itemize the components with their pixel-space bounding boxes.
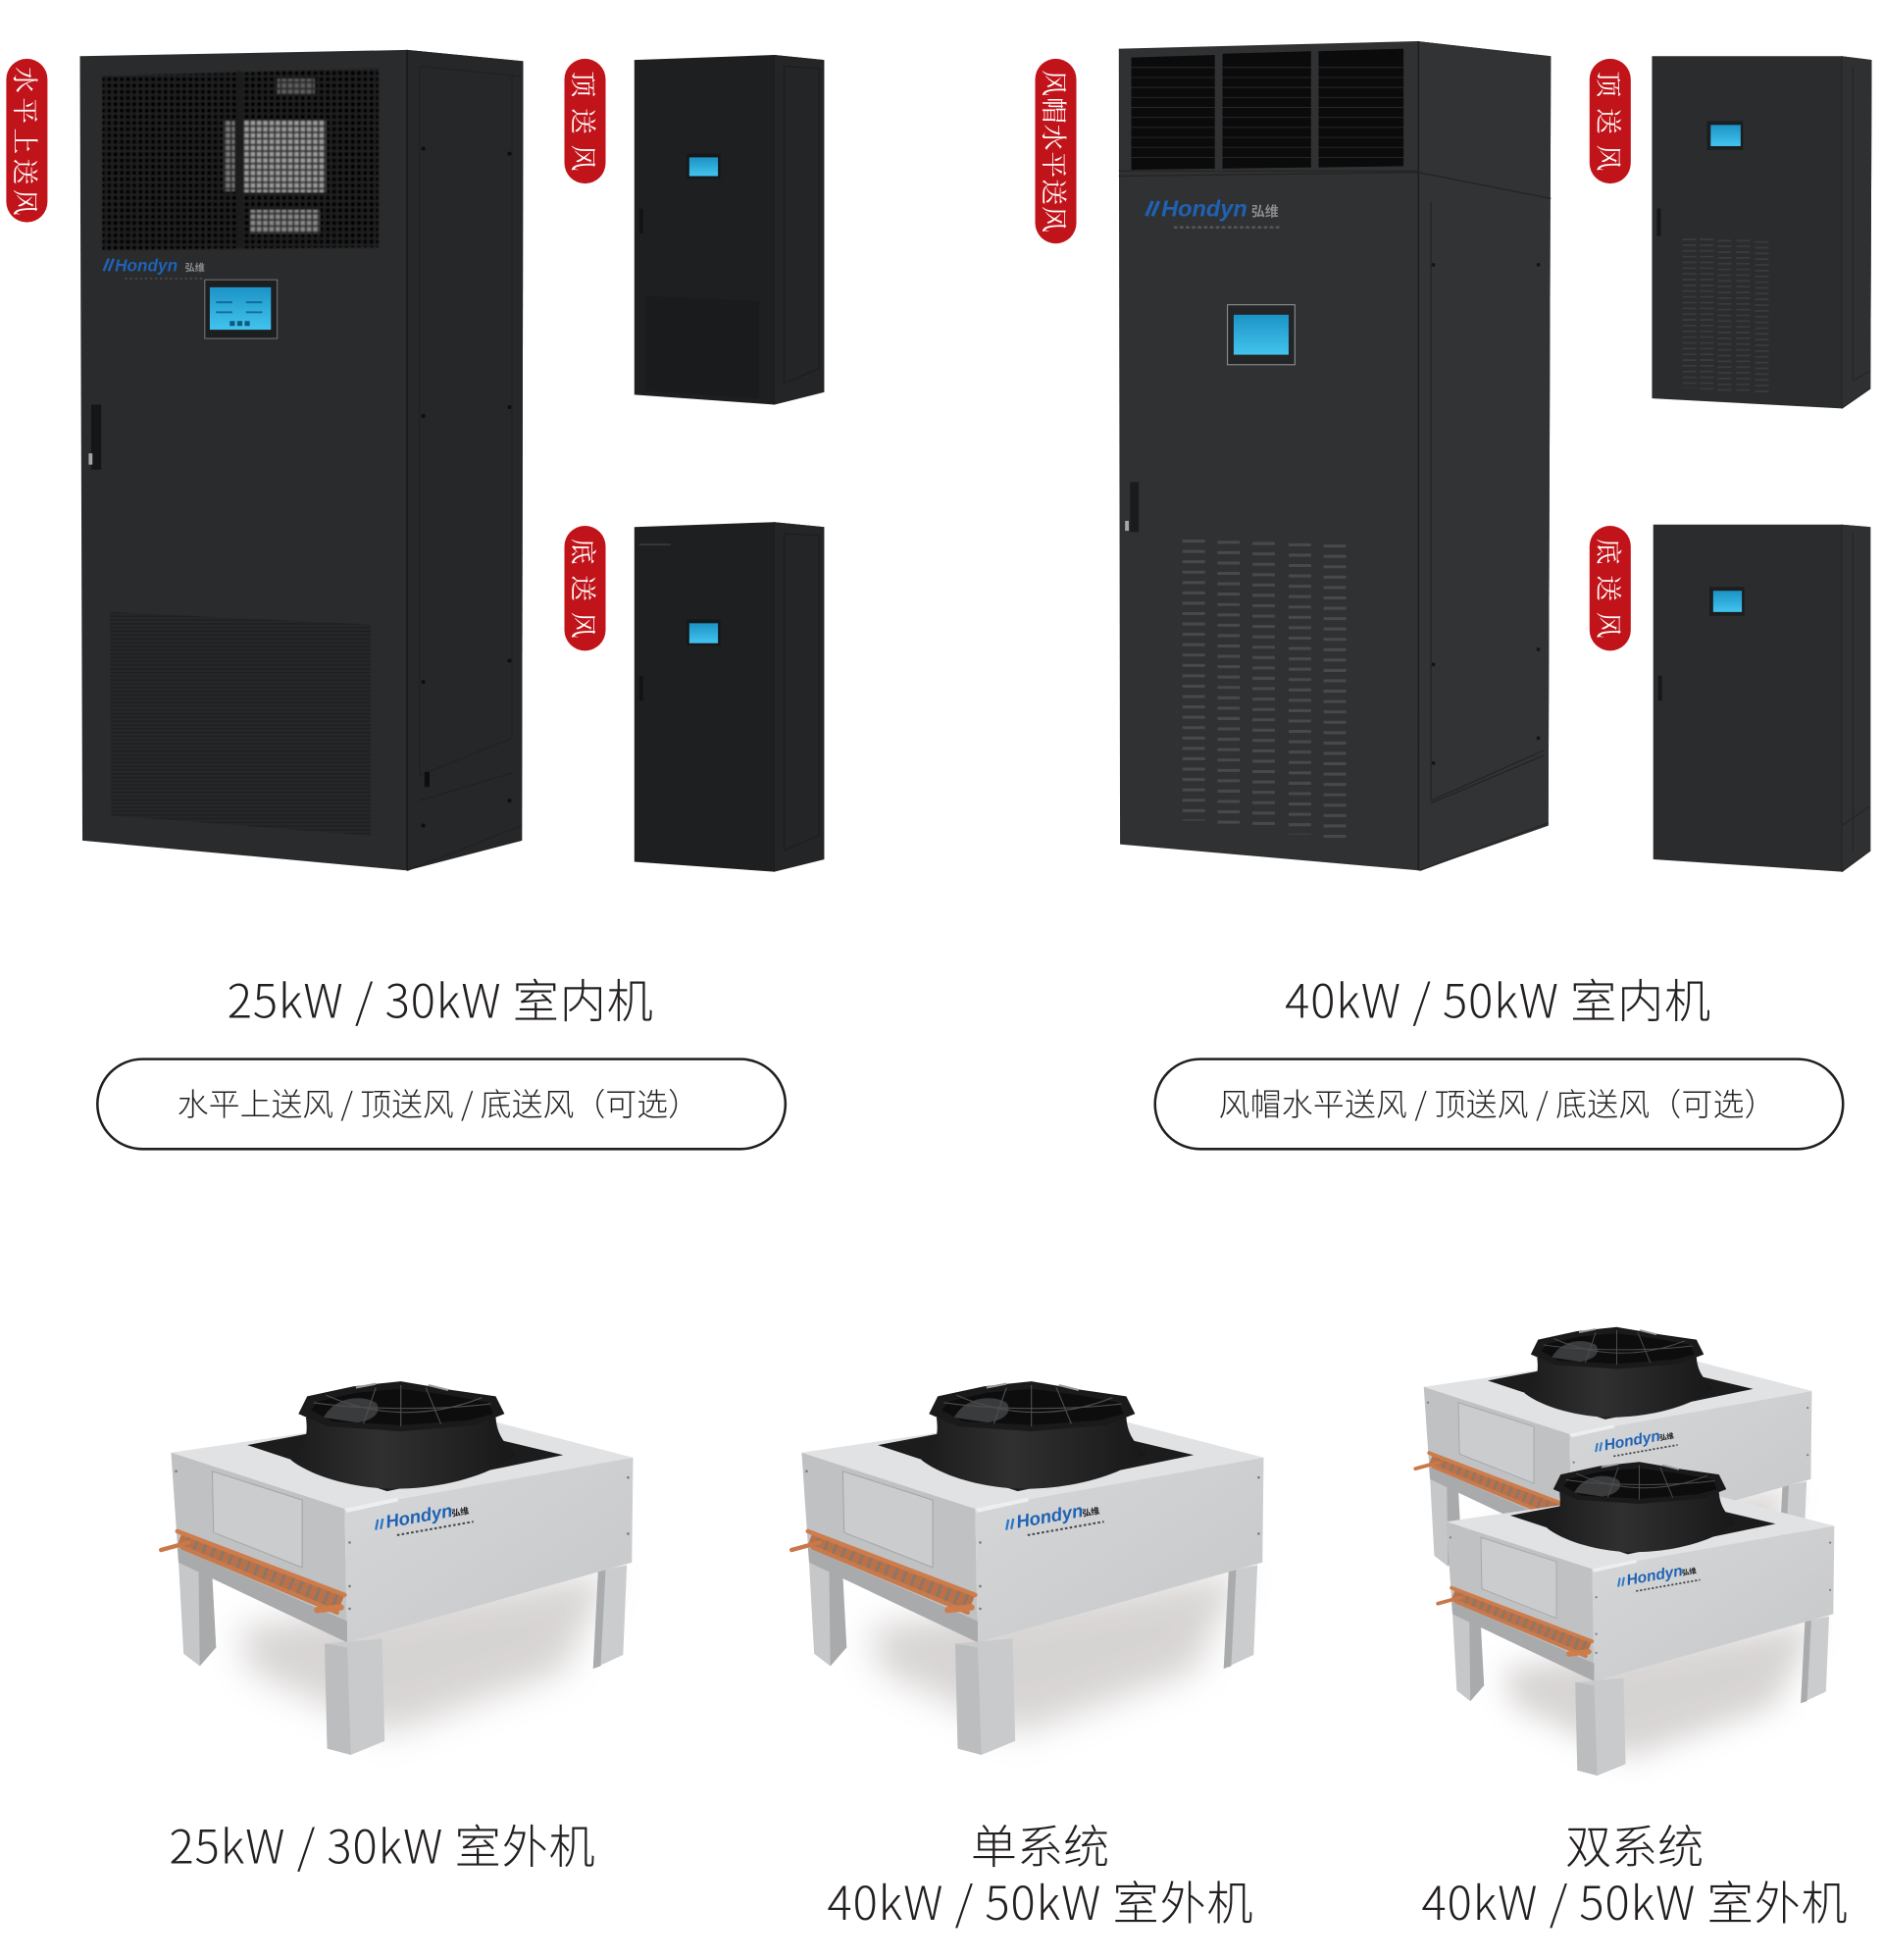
- badge: horizontal top supply: 水平上送风: [8, 67, 46, 216]
- logo: Hondyn: [1616, 1560, 1701, 1594]
- caption: dual system outdoor: 40kW / 50kW 室外机: [1422, 1866, 1848, 1934]
- product: 25/30kW bottom supply unit: [635, 522, 824, 872]
- product: 25/30kW main indoor unit, horizontal top supply: [80, 50, 523, 870]
- logo: Hondyn: [1146, 195, 1280, 228]
- control screen: [687, 154, 721, 179]
- product: 40/50kW main indoor unit with hood: [1119, 41, 1551, 870]
- logo: Hondyn: 弘维: [1681, 1565, 1698, 1578]
- logo: Hondyn: Hondyn: [384, 1500, 454, 1532]
- option pill: 40/50kW: [1155, 1059, 1843, 1149]
- product: 25/30kW top supply unit: [635, 55, 824, 405]
- caption: dual system outdoor: [1422, 1810, 1848, 1934]
- heading: 25/30kW indoor: 25kW / 30kW 室内机: [228, 964, 653, 1032]
- door handle: [88, 405, 101, 470]
- logo: Hondyn: Hondyn: [115, 255, 178, 275]
- logo: Hondyn: 弘维: [1081, 1504, 1100, 1520]
- louvre vents: [1690, 238, 1761, 394]
- logo: Hondyn: [1594, 1425, 1678, 1459]
- product: dual-system front outdoor unit: [1438, 1462, 1834, 1776]
- control screen: [1228, 305, 1295, 365]
- product: 25/30kW outdoor unit: [161, 1381, 634, 1755]
- caption: dual system outdoor: 双系统: [1565, 1810, 1704, 1878]
- logo: Hondyn: [1003, 1497, 1104, 1538]
- caption: 25/30kW outdoor: 25kW / 30kW 室外机: [170, 1810, 595, 1878]
- option pill: 25/30kW: 水平上送风 / 顶送风 / 底送风（可选）: [178, 1080, 699, 1125]
- lower vent: [110, 612, 371, 836]
- control screen: [1706, 121, 1743, 150]
- logo: Hondyn: Hondyn: [1161, 195, 1247, 221]
- badge: hood horizontal supply: 风帽水平送风: [1037, 70, 1075, 232]
- logo: Hondyn: Hondyn: [1015, 1500, 1085, 1532]
- caption: single system outdoor: 单系统: [971, 1810, 1109, 1878]
- side rivets: [422, 146, 512, 828]
- control screen: [687, 619, 721, 645]
- logo: Hondyn: Hondyn: [1625, 1563, 1684, 1589]
- badge: bottom supply: 底送风: [1591, 539, 1629, 639]
- louvre vents: [1194, 540, 1335, 840]
- badge: bottom supply: 底送风: [566, 539, 604, 639]
- door handle: [1125, 482, 1139, 532]
- logo: Hondyn: [373, 1497, 474, 1538]
- caption: single system outdoor: 40kW / 50kW 室外机: [828, 1866, 1253, 1934]
- product: dual-system rear outdoor unit: [1415, 1327, 1811, 1641]
- product: 40/50kW top supply unit: [1652, 56, 1872, 408]
- logo: Hondyn: 弘维: [450, 1504, 470, 1520]
- hood vents: [1132, 49, 1403, 171]
- product: single-system 40/50kW outdoor unit: [791, 1381, 1263, 1755]
- logo: Hondyn: 弘维: [184, 259, 205, 274]
- option pill: 40/50kW: 风帽水平送风 / 顶送风 / 底送风（可选）: [1219, 1080, 1775, 1125]
- option pill: 25/30kW: [97, 1059, 786, 1149]
- product: 40/50kW bottom supply unit: [1654, 525, 1870, 872]
- logo: Hondyn: 弘维: [1658, 1430, 1675, 1443]
- side rivets: [1432, 263, 1540, 765]
- mesh grille: [102, 69, 379, 250]
- caption: single system outdoor: [828, 1810, 1253, 1934]
- badge: top supply: 顶送风: [566, 72, 604, 171]
- logo: Hondyn: Hondyn: [1603, 1428, 1661, 1454]
- heading: 40/50kW indoor: 40kW / 50kW 室内机: [1285, 964, 1710, 1032]
- badge: top supply: 顶送风: [1591, 72, 1629, 171]
- control screen: [205, 280, 278, 338]
- control screen: [1709, 587, 1745, 616]
- logo: Hondyn: 弘维: [1251, 201, 1279, 221]
- logo: Hondyn: [104, 255, 205, 279]
